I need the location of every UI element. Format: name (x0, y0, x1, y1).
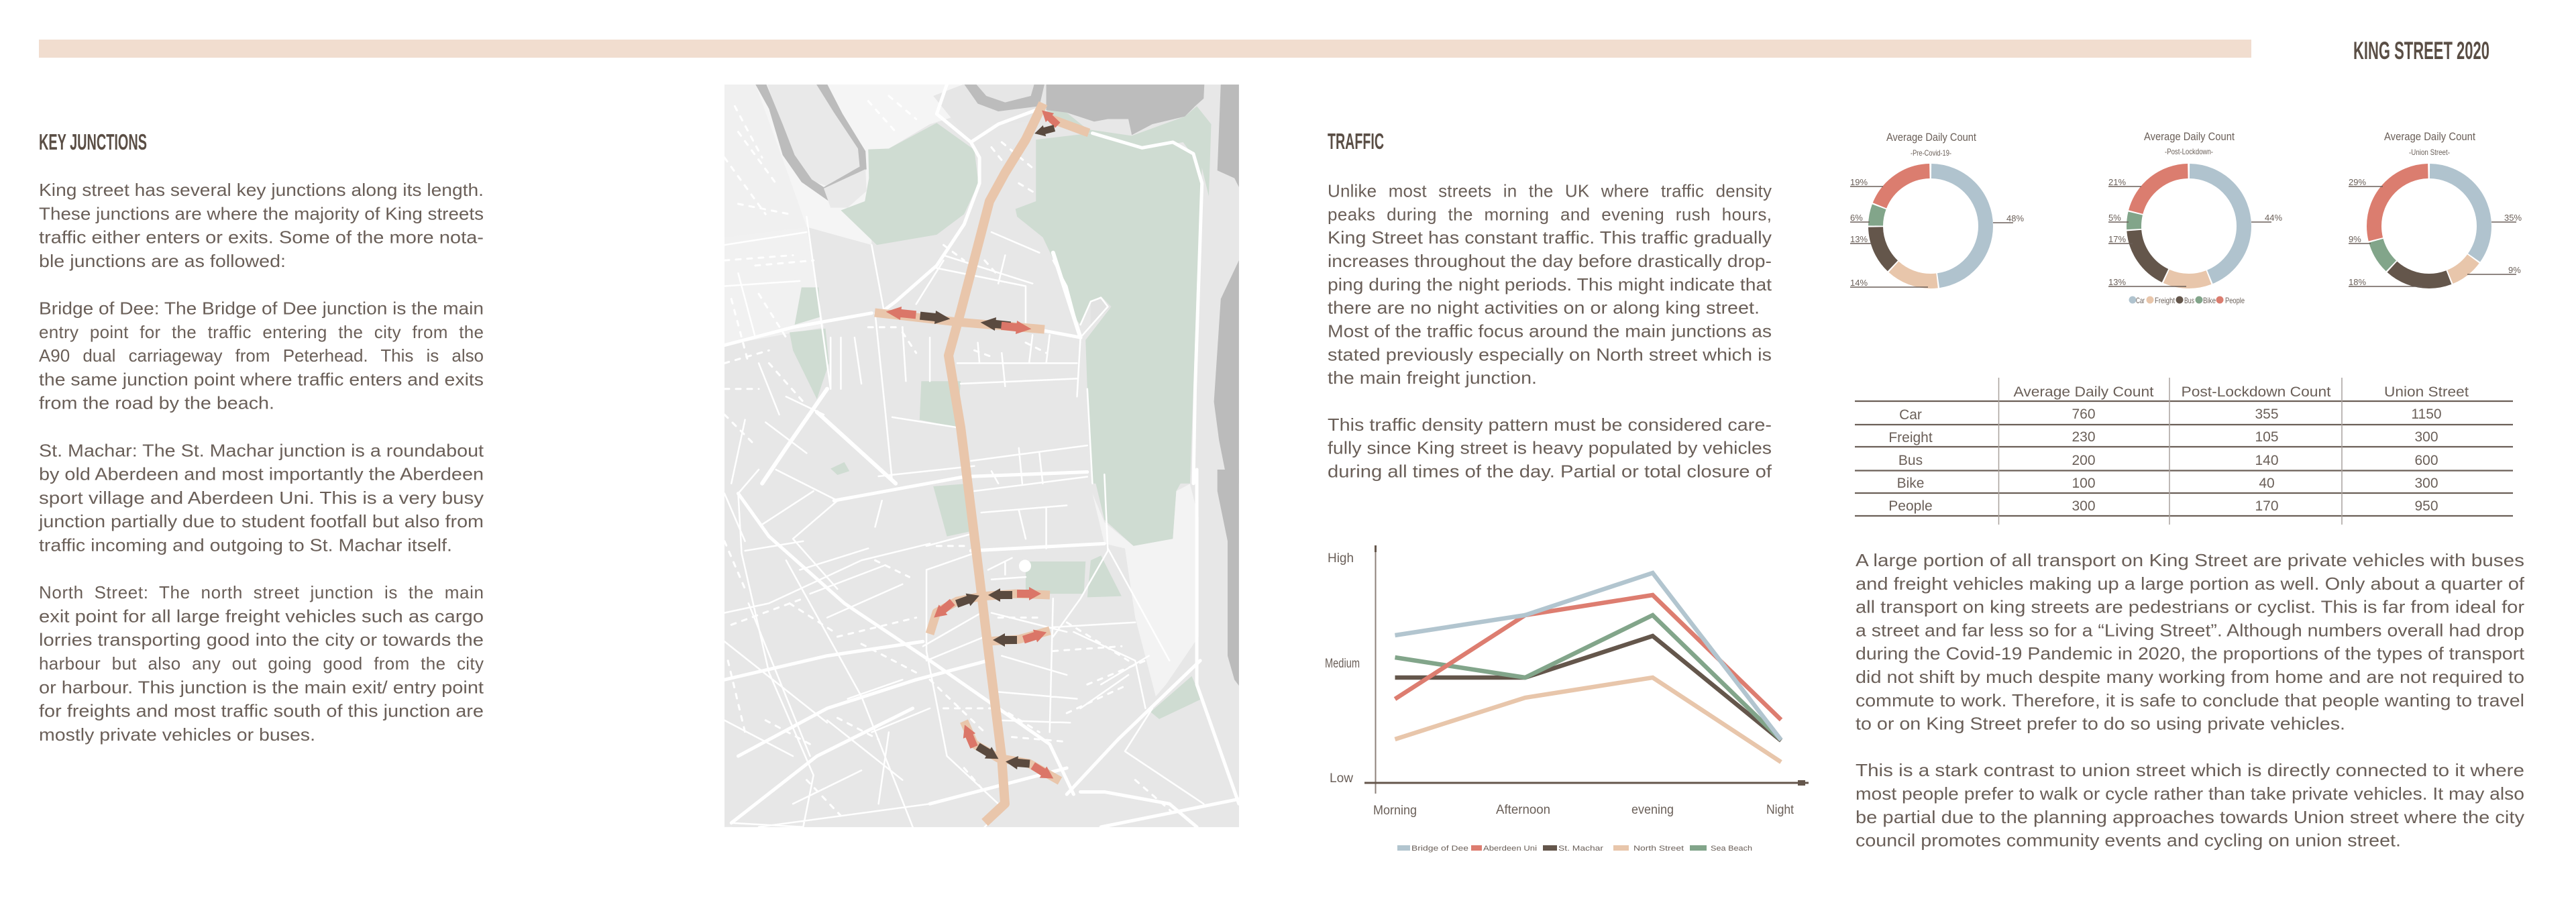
y-axis labels: High (1328, 551, 1354, 566)
text block: traffic: King Street has constant traffic. This traffic gradually (1328, 227, 1772, 248)
text block: key junctions: or harbour. This junction is the main exit/ entry point (39, 677, 484, 697)
text block: traffic: Unlike most streets in the UK where traffic density (1328, 181, 1772, 201)
table rows: 40 (2259, 476, 2275, 491)
comparison table (1855, 378, 2513, 525)
x-axis labels (1373, 803, 1794, 818)
y-axis labels: Medium (1325, 657, 1360, 671)
line chart: traffic by time of day (1325, 545, 1809, 853)
donut chart: pre-Covid-19: 13% (1850, 234, 1868, 244)
text block: key junctions: lorries transporting good into the city or towards the (39, 630, 484, 650)
text block: key junctions: entry point for the traffic entering the city from the (39, 322, 484, 342)
text block: transport analysis: most people prefer to walk or cycle rather than take private vehicles. It may also (1856, 784, 2524, 804)
table rows: 300 (2072, 498, 2096, 514)
donut chart: post-lockdown: -Post-Lockdown- (2165, 147, 2213, 156)
heading: traffic: TRAFFIC (1328, 129, 1384, 154)
donut chart: Union Street: Average Daily Count (2384, 130, 2475, 143)
text block: key junctions: sport village and Aberdeen Uni. This is a very busy (39, 488, 484, 508)
text block: key junctions: harbour but also any out going good from the city (39, 653, 484, 674)
text block: transport analysis: all transport on king streets are pedestrians or cyclist. This is far from ideal for (1856, 597, 2524, 617)
table rows: 300 (2414, 429, 2438, 445)
text block: key junctions: from the road by the beach. (39, 393, 274, 413)
donut legend: Car (2136, 296, 2145, 305)
donut chart: Union Street (2349, 130, 2522, 287)
donut chart: post-lockdown: Average Daily Count (2144, 130, 2235, 143)
text block: transport analysis: commute to work. Therefore, it is safe to conclude that people wanting to travel (1856, 690, 2524, 710)
chart legend: Aberdeen Uni (1483, 845, 1537, 853)
donut chart: post-lockdown: 17% (2108, 234, 2126, 244)
table rows: 230 (2072, 429, 2096, 445)
junction branches (875, 119, 1089, 781)
donut chart: Union Street: 18% (2349, 277, 2366, 287)
text block: transport analysis (1856, 550, 2525, 851)
x-axis labels: Afternoon (1496, 803, 1550, 817)
donut legend: Bus (2184, 296, 2194, 305)
chart legend: Bridge of Dee (1411, 845, 1468, 853)
King Street road (949, 103, 1043, 822)
text block: key junctions: mostly private vehicles or buses. (39, 725, 315, 745)
text block: transport analysis: This is a stark contrast to union street which is directly connected to it where (1856, 760, 2524, 780)
text block: traffic (1328, 181, 1772, 481)
table rows: 105 (2255, 429, 2279, 445)
donut chart: Union Street: -Union Street- (2409, 148, 2450, 157)
donut legend: People (2225, 296, 2245, 305)
text block: transport analysis: council promotes community events and cycling on union street. (1856, 830, 2401, 851)
donut chart: pre-Covid-19: 48% (2006, 213, 2024, 223)
table header (2014, 384, 2469, 400)
x-axis labels: Night (1766, 803, 1794, 817)
donut chart: pre-Covid-19: 14% (1850, 278, 1868, 288)
chart legend: St. Machar (1558, 845, 1603, 853)
text block: traffic: This traffic density pattern must be considered care- (1328, 415, 1772, 435)
map: southern section (724, 470, 1239, 841)
table rows: People (1888, 498, 1933, 514)
x-axis labels: Morning (1373, 804, 1417, 818)
table rows: Freight (1888, 430, 1933, 445)
text block: traffic: the main freight junction. (1328, 368, 1537, 388)
text block: traffic: increases throughout the day before drastically drop- (1328, 251, 1772, 271)
table rows: 300 (2414, 476, 2438, 491)
donut chart: Union Street: 9% (2349, 234, 2361, 244)
text block: transport analysis: be partial due to the planning approaches towards Union street where the city (1856, 807, 2524, 827)
text block: traffic: ping during the night periods. This might indicate that (1328, 274, 1772, 294)
header band (39, 40, 2251, 58)
donut chart: post-lockdown (2108, 130, 2282, 287)
donut chart: post-lockdown: 5% (2108, 213, 2121, 223)
donut chart: pre-Covid-19: 19% (1850, 177, 1868, 187)
text block: key junctions: exit point for all large freight vehicles such as cargo (39, 606, 484, 626)
text block: transport analysis: did not shift by much despite many working from home and are not required to (1856, 667, 2524, 687)
table rows: 200 (2072, 453, 2096, 468)
chart legend: Sea Beach (1711, 845, 1752, 853)
text block: key junctions: traffic incoming and outgoing to St. Machar itself. (39, 535, 452, 555)
text block: key junctions: Bridge of Dee: The Bridge of Dee junction is the main (39, 298, 484, 318)
text block: traffic: peaks during the morning and evening rush hours, (1328, 204, 1772, 224)
donut legend: Freight (2155, 296, 2176, 305)
text block: transport analysis: a street and far less so for a “Living Street”. Although numbers overall had drop (1856, 620, 2524, 640)
x-axis labels: evening (1631, 803, 1674, 817)
table rows: 600 (2414, 453, 2438, 468)
text block: key junctions: North Street: The north street junction is the main (39, 582, 484, 602)
table header: Union Street (2384, 384, 2469, 400)
text block: key junctions (38, 180, 484, 745)
table rows: Car (1899, 407, 1922, 423)
text block: key junctions: for freights and most traffic south of this junction are (39, 701, 484, 721)
text block: traffic: fully since King street is heavy populated by vehicles (1328, 438, 1772, 458)
text block: key junctions: ble junctions are as followed: (39, 251, 286, 271)
table rows: 100 (2072, 476, 2096, 491)
donut legend (2129, 296, 2245, 305)
text block: traffic: there are no night activities on or along king street. (1328, 298, 1760, 318)
chart legend: North Street (1633, 845, 1684, 853)
y-axis labels (1325, 551, 1360, 786)
text block: key junctions: traffic either enters or exits. Some of the more nota- (39, 227, 484, 248)
table header: Post-Lockdown Count (2182, 384, 2331, 400)
text block: transport analysis: A large portion of all transport on King Street are private vehicles with buses (1856, 550, 2524, 570)
donut chart: pre-Covid-19 (1850, 131, 2024, 288)
table rows: Bike (1897, 476, 1924, 491)
donut chart: Union Street: 35% (2504, 213, 2522, 223)
text block: key junctions: These junctions are where the majority of King streets (39, 203, 484, 223)
map: northern section (724, 84, 1239, 484)
donut chart: Union Street: 29% (2349, 177, 2366, 187)
donut chart: pre-Covid-19: 6% (1850, 213, 1863, 223)
donut legend: Bike (2203, 296, 2216, 305)
donut chart: Union Street: 9% (2508, 265, 2521, 275)
donut chart: post-lockdown: 13% (2108, 277, 2126, 287)
table rows: 140 (2255, 453, 2279, 468)
text block: traffic: Most of the traffic focus around the main junctions as (1328, 321, 1772, 341)
text block: traffic: stated previously especially on North street which is (1328, 344, 1772, 364)
table rows (1888, 407, 2442, 514)
text block: transport analysis: to or on King Street prefer to do so using private vehicles. (1856, 714, 2345, 734)
text block: transport analysis: during the Covid-19 Pandemic in 2020, the proportions of the types of transport (1856, 643, 2525, 663)
table rows: 950 (2414, 498, 2438, 514)
table rows: 1150 (2411, 407, 2442, 422)
text block: key junctions: A90 dual carriageway from Peterhead. This is also (39, 345, 484, 366)
donut chart: post-lockdown: 21% (2108, 177, 2126, 187)
text block: key junctions: by old Aberdeen and most importantly the Aberdeen (39, 464, 484, 484)
text block: key junctions: junction partially due to student footfall but also from (38, 511, 484, 531)
y-axis labels: Low (1330, 771, 1353, 786)
donut chart: pre-Covid-19: -Pre-Covid-19- (1911, 148, 1951, 158)
map: King Street junctions (724, 84, 1239, 841)
text block: traffic: during all times of the day. Partial or total closure of (1328, 461, 1772, 481)
donut chart: post-lockdown: 44% (2265, 213, 2282, 223)
table grid (1855, 378, 2513, 525)
text block: key junctions: King street has several key junctions along its length. (39, 180, 484, 200)
title: KING STREET 2020 (2353, 37, 2489, 64)
chart series (1395, 573, 1781, 762)
table rows: 170 (2255, 498, 2279, 514)
text block: key junctions: the same junction point where traffic enters and exits (39, 369, 484, 389)
table header: Average Daily Count (2014, 384, 2154, 400)
table rows: Bus (1898, 453, 1923, 468)
traffic arrows (885, 106, 1062, 784)
chart legend (1397, 845, 1752, 853)
heading: key junctions: KEY JUNCTIONS (39, 129, 147, 154)
text block: key junctions: St. Machar: The St. Machar junction is a roundabout (39, 440, 484, 460)
chart axes (1364, 545, 1809, 794)
text block: transport analysis: and freight vehicles making up a large portion as well. Only about a quarter of (1856, 574, 2525, 594)
table rows: 760 (2072, 407, 2096, 422)
table rows: 355 (2255, 407, 2279, 422)
donut chart: pre-Covid-19: Average Daily Count (1886, 131, 1976, 144)
